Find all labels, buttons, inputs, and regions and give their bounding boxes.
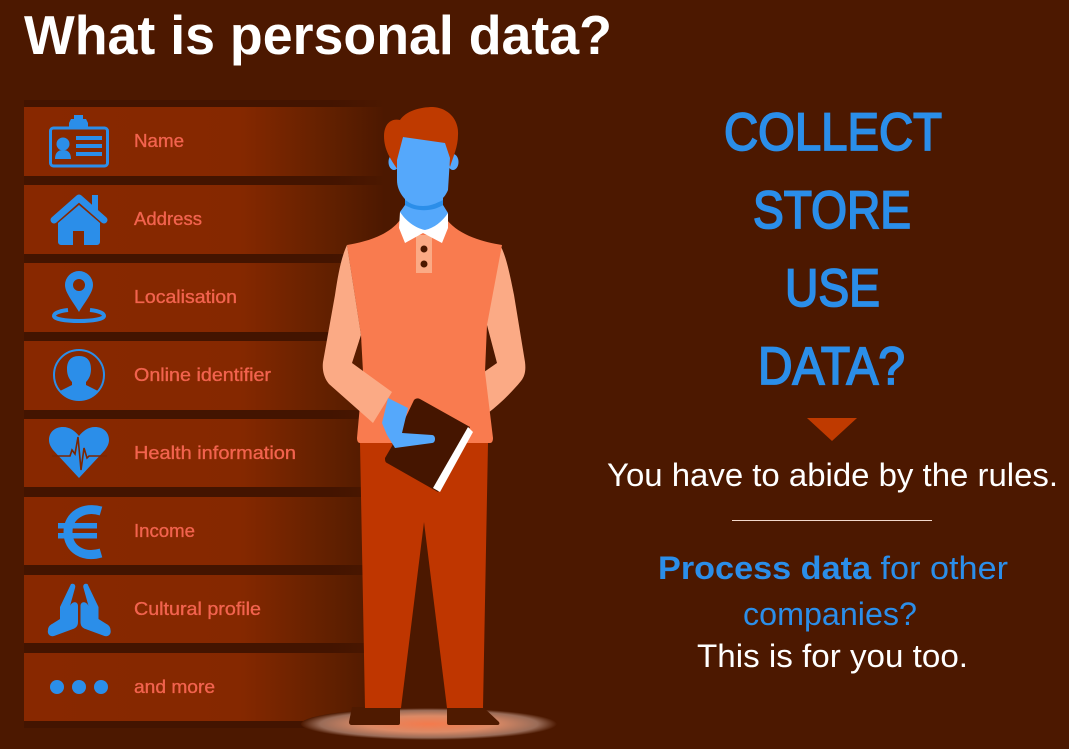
icon: three dots — [50, 680, 108, 694]
panel: personal data list — [24, 100, 385, 728]
buttons — [420, 246, 428, 268]
vest — [347, 220, 502, 443]
hand — [382, 398, 435, 448]
icon: heart with pulse — [49, 427, 109, 478]
spotlight — [301, 708, 557, 740]
text: abide by the rules: You have to abide by the rules. — [607, 457, 1058, 493]
left sleeve — [323, 245, 392, 423]
icon: map pin — [54, 271, 104, 321]
label: localisation: Localisation — [134, 286, 237, 307]
icon: euro — [58, 510, 101, 554]
icon: house — [54, 195, 104, 245]
label: online identifier: Online identifier — [134, 364, 271, 385]
row: cultural profile — [24, 575, 385, 643]
label: health information: Health information — [134, 442, 296, 463]
hair — [384, 107, 458, 170]
row: localisation — [24, 263, 385, 332]
label: income: Income — [134, 520, 195, 541]
label: name: Name — [134, 130, 184, 151]
neck shadow — [405, 200, 443, 210]
label: and more: and more — [134, 676, 215, 697]
label: address: Address — [134, 208, 202, 229]
collar — [399, 212, 448, 243]
row: income — [24, 497, 385, 565]
text block: processors: This is for you too. — [697, 638, 968, 674]
row: health information — [24, 419, 385, 487]
text block: collect store use data: DATA? — [758, 337, 905, 396]
illustration: standing man holding a book — [301, 107, 557, 740]
ears — [388, 154, 458, 170]
shoes — [349, 707, 499, 725]
row: online identifier — [24, 341, 385, 410]
text block: collect store use data — [724, 103, 942, 396]
icon: person in circle — [54, 350, 104, 400]
book — [385, 398, 470, 492]
row: address — [24, 185, 385, 254]
trousers — [360, 443, 488, 708]
button placket — [416, 235, 432, 273]
text block: collect store use data: COLLECT — [724, 103, 942, 162]
title: What is personal data? — [24, 4, 612, 66]
text block: processors: companies? — [743, 596, 917, 632]
row: name — [24, 107, 385, 176]
text block: collect store use data: STORE — [753, 181, 911, 240]
icon: id badge — [50, 115, 108, 166]
face — [397, 137, 450, 206]
label: cultural profile: Cultural profile — [134, 598, 261, 619]
neck — [400, 195, 448, 230]
arrow: downward triangle — [807, 418, 857, 441]
book pages — [433, 427, 473, 492]
row: and more — [24, 653, 385, 721]
text block: processors: Process data for other — [658, 550, 1008, 586]
icon: praying hands — [48, 584, 111, 636]
right sleeve — [480, 245, 525, 413]
text block: collect store use data: USE — [785, 259, 880, 318]
text block: processors — [658, 550, 1008, 674]
